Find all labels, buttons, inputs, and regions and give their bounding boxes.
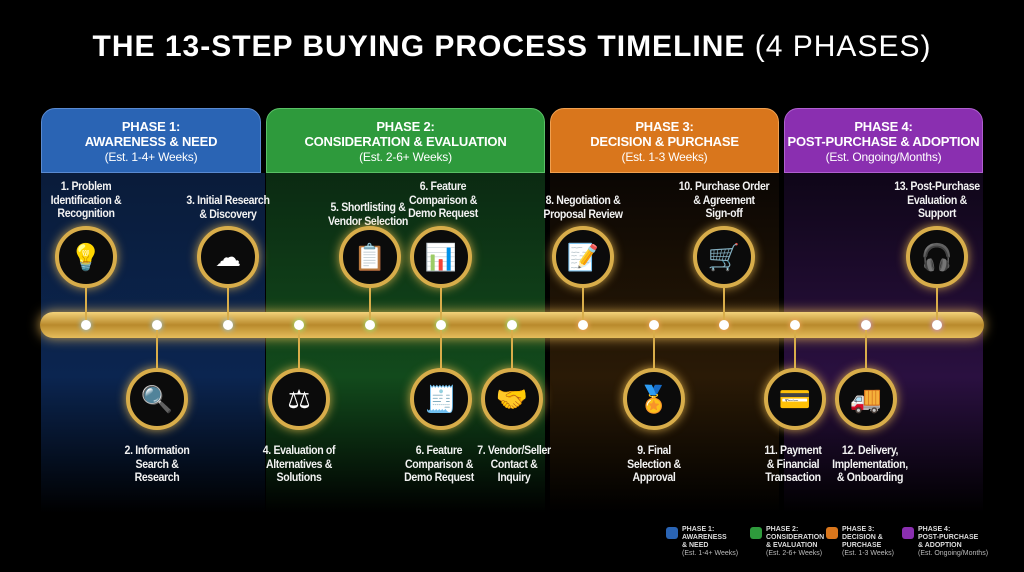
icon: cloud question: ☁: [215, 242, 241, 272]
step 9: [616, 360, 692, 484]
phase 1 header: AWARENESS & NEED: [85, 134, 217, 149]
legend: CONSIDERATION: [766, 534, 824, 541]
step 1: Identification &: [51, 192, 121, 206]
icon: support headset: 🎧: [921, 242, 953, 272]
legend: DECISION &: [842, 534, 883, 541]
legend: PHASE 2:: [766, 526, 798, 533]
legend: (Est. 1-3 Weeks): [842, 550, 894, 557]
step 8: 8. Negotiation &: [546, 193, 620, 207]
step 12: 12. Delivery,: [842, 443, 898, 457]
phase 1 header: PHASE 1:: [122, 119, 180, 134]
step 10: 10. Purchase Order: [679, 179, 769, 193]
phase 1 header: [41, 108, 261, 173]
legend: AWARENESS: [682, 534, 727, 541]
step 9: Selection &: [627, 456, 681, 470]
phase 3 header: DECISION & PURCHASE: [590, 134, 739, 149]
step 2: [118, 360, 196, 484]
icon: handshake: 🤝: [496, 384, 528, 414]
legend: PURCHASE: [842, 542, 881, 549]
step 13: 13. Post-Purchase: [894, 179, 980, 193]
step 9: Approval: [633, 470, 675, 484]
legend: & ADOPTION: [918, 542, 962, 549]
step 6 bottom: Comparison &: [405, 456, 473, 470]
step 9: 9. Final: [637, 443, 671, 457]
phase 4 header: PHASE 4:: [854, 119, 913, 134]
legend: & EVALUATION: [766, 542, 817, 549]
phase 1 header: (Est. 1-4+ Weeks): [105, 150, 197, 164]
step 1: Recognition: [57, 206, 115, 220]
step 11: Transaction: [765, 470, 821, 484]
step 8: Proposal Review: [543, 206, 623, 220]
step 12: Implementation,: [832, 456, 908, 470]
phase 3 header: [550, 108, 779, 173]
step 4: 4. Evaluation of: [263, 443, 335, 457]
phase 3 header: PHASE 3:: [635, 119, 694, 134]
icon: award: 🏅: [638, 384, 670, 414]
icon: scales: [268, 368, 330, 430]
step 6 top: Demo Request: [408, 206, 478, 220]
step 1: [48, 179, 124, 296]
timeline bar: [40, 312, 984, 338]
step 8: [543, 193, 623, 296]
phase 2 header: PHASE 2:: [376, 119, 435, 134]
legend: (Est. 1-4+ Weeks): [682, 550, 738, 557]
step 4: Alternatives &: [266, 456, 332, 470]
step 13: Support: [918, 206, 956, 220]
step 4: [260, 360, 338, 484]
step 5: 5. Shortlisting &: [331, 200, 405, 214]
step 3: 3. Initial Research: [186, 193, 270, 207]
step 10: [679, 179, 770, 296]
icon: payment card: 💳: [779, 384, 811, 414]
phase 4 header: [784, 108, 983, 173]
icon: delivery truck: 🚚: [850, 384, 882, 414]
step 6 bottom: 6. Feature: [416, 443, 462, 457]
icon: magnifier: 🔍: [141, 384, 173, 414]
icon: comparison chart: [410, 226, 472, 288]
step 2: 2. Information: [125, 443, 189, 457]
step 6 top: [403, 179, 480, 296]
icon: clipboard: [339, 226, 401, 288]
step 2: Search &: [136, 456, 178, 470]
step 11: [756, 360, 833, 484]
icon: scales: ⚖: [287, 384, 311, 414]
phase 3 header: (Est. 1-3 Weeks): [622, 150, 707, 164]
step 6 bottom: [402, 360, 479, 484]
icon: payment card: [764, 368, 826, 430]
phase 2 header: (Est. 2-6+ Weeks): [359, 150, 452, 164]
legend: (Est. 2-6+ Weeks): [766, 550, 822, 557]
icon: lightbulb: [55, 226, 117, 288]
legend: PHASE 3:: [842, 526, 874, 533]
step 7: 7. Vendor/Seller: [477, 443, 551, 457]
icon: clipboard: 📋: [354, 242, 386, 272]
icon: lightbulb: 💡: [70, 242, 102, 272]
step 2: Research: [135, 470, 179, 484]
step 6 top: 6. Feature: [420, 179, 466, 193]
step 4: Solutions: [277, 470, 321, 484]
icon: support headset: [906, 226, 968, 288]
legend: & NEED: [682, 542, 708, 549]
step 11: & Financial: [767, 456, 819, 470]
legend: [666, 526, 988, 557]
title: THE 13-STEP BUYING PROCESS TIMELINE (4 PHASES): [93, 30, 931, 63]
legend: PHASE 1:: [682, 526, 714, 533]
phase 4 header: POST-PURCHASE & ADOPTION: [788, 134, 979, 149]
panel: phase 2 zone: [266, 173, 545, 513]
step 12: [828, 360, 908, 484]
panel: phase 4 zone: [784, 173, 983, 513]
step 10: & Agreement: [693, 192, 755, 206]
step 10: Sign-off: [705, 206, 743, 220]
step 3: & Discovery: [199, 206, 257, 220]
icon: magnifier: [126, 368, 188, 430]
step 7: Contact &: [491, 456, 537, 470]
icon: handshake: [481, 368, 543, 430]
icon: delivery truck: [835, 368, 897, 430]
panel: phase 3 zone: [550, 173, 779, 513]
icon: award: [623, 368, 685, 430]
step 6 top: Comparison &: [409, 192, 477, 206]
step 1: 1. Problem: [61, 179, 111, 193]
step 6 bottom: Demo Request: [404, 470, 474, 484]
step 3: [186, 193, 270, 296]
legend: POST-PURCHASE: [918, 534, 978, 541]
phase 4 header: (Est. Ongoing/Months): [826, 150, 941, 164]
icon: cart: 🛒: [708, 242, 740, 272]
step 7: Inquiry: [498, 470, 530, 484]
step 7: [474, 360, 551, 484]
phase 2 header: CONSIDERATION & EVALUATION: [304, 134, 507, 149]
icon: comparison chart: 📊: [425, 242, 457, 272]
step 5: Vendor Selection: [328, 214, 408, 228]
icon: report: [410, 368, 472, 430]
step 13: Evaluation &: [907, 192, 967, 206]
stems: [85, 288, 87, 320]
icon: document pen: 📝: [567, 242, 599, 272]
phase 2 header: [266, 108, 545, 173]
icon: document pen: [552, 226, 614, 288]
icon: cloud question: [197, 226, 259, 288]
icon: report: 🧾: [425, 384, 457, 414]
icon: cart: [693, 226, 755, 288]
panel: phase 1 zone: [41, 173, 265, 513]
step 11: 11. Payment: [764, 443, 822, 457]
legend: (Est. Ongoing/Months): [918, 550, 988, 557]
legend: PHASE 4:: [918, 526, 950, 533]
step 5: [328, 200, 408, 296]
step 12: & Onboarding: [837, 470, 903, 484]
step 13: [894, 179, 980, 296]
